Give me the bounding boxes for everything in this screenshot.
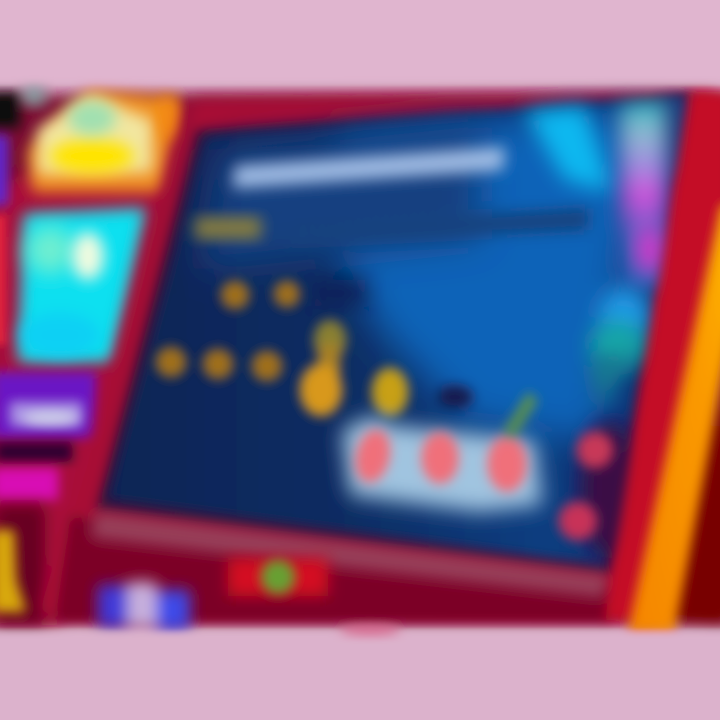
blue and teal blob (590, 287, 650, 410)
cyan corner shape (525, 106, 612, 192)
dark gap (0, 442, 73, 462)
orange dots (156, 280, 408, 416)
maroon base (55, 516, 612, 622)
black corner (0, 92, 20, 128)
header row (195, 208, 590, 244)
top pink cover (0, 0, 720, 80)
left column (0, 86, 190, 625)
dark lower left (0, 505, 45, 625)
right stripes (605, 92, 720, 632)
teal corner glow (22, 86, 46, 106)
dark patch (315, 280, 365, 306)
bell two (372, 368, 408, 416)
orange stripe (628, 205, 720, 632)
dark corner top right (660, 96, 690, 175)
red frame (40, 92, 715, 620)
pink patch on lower edge (340, 624, 400, 636)
yellow figure (0, 530, 26, 612)
screen (106, 98, 688, 566)
blue and white buttons (98, 582, 190, 630)
bright blue centre (340, 110, 640, 440)
magenta glow (637, 226, 663, 274)
dark band behind cabinet (0, 94, 720, 622)
dark corner (670, 390, 720, 625)
white cherry cards (342, 415, 542, 512)
title (233, 147, 505, 188)
icon: yellow house (28, 90, 180, 192)
purple strip (0, 135, 8, 205)
red cherries (351, 426, 527, 492)
grey highlight strip (90, 512, 610, 598)
cyan panel (18, 208, 146, 362)
inner dark frame edge (96, 94, 692, 575)
purple label (0, 372, 96, 438)
red edge strip (0, 215, 6, 345)
stems (437, 385, 538, 438)
rainbow ribbon (620, 100, 668, 290)
red button group (228, 558, 328, 596)
lower panel (55, 512, 612, 630)
magenta label (0, 468, 58, 500)
right red buttons (559, 420, 640, 560)
left panel backing (0, 100, 190, 625)
crimson side (605, 92, 720, 620)
cabinet frame (40, 92, 715, 620)
mid blue wash (200, 125, 480, 270)
tall bell (300, 320, 346, 416)
bottom pink cover (0, 634, 720, 720)
